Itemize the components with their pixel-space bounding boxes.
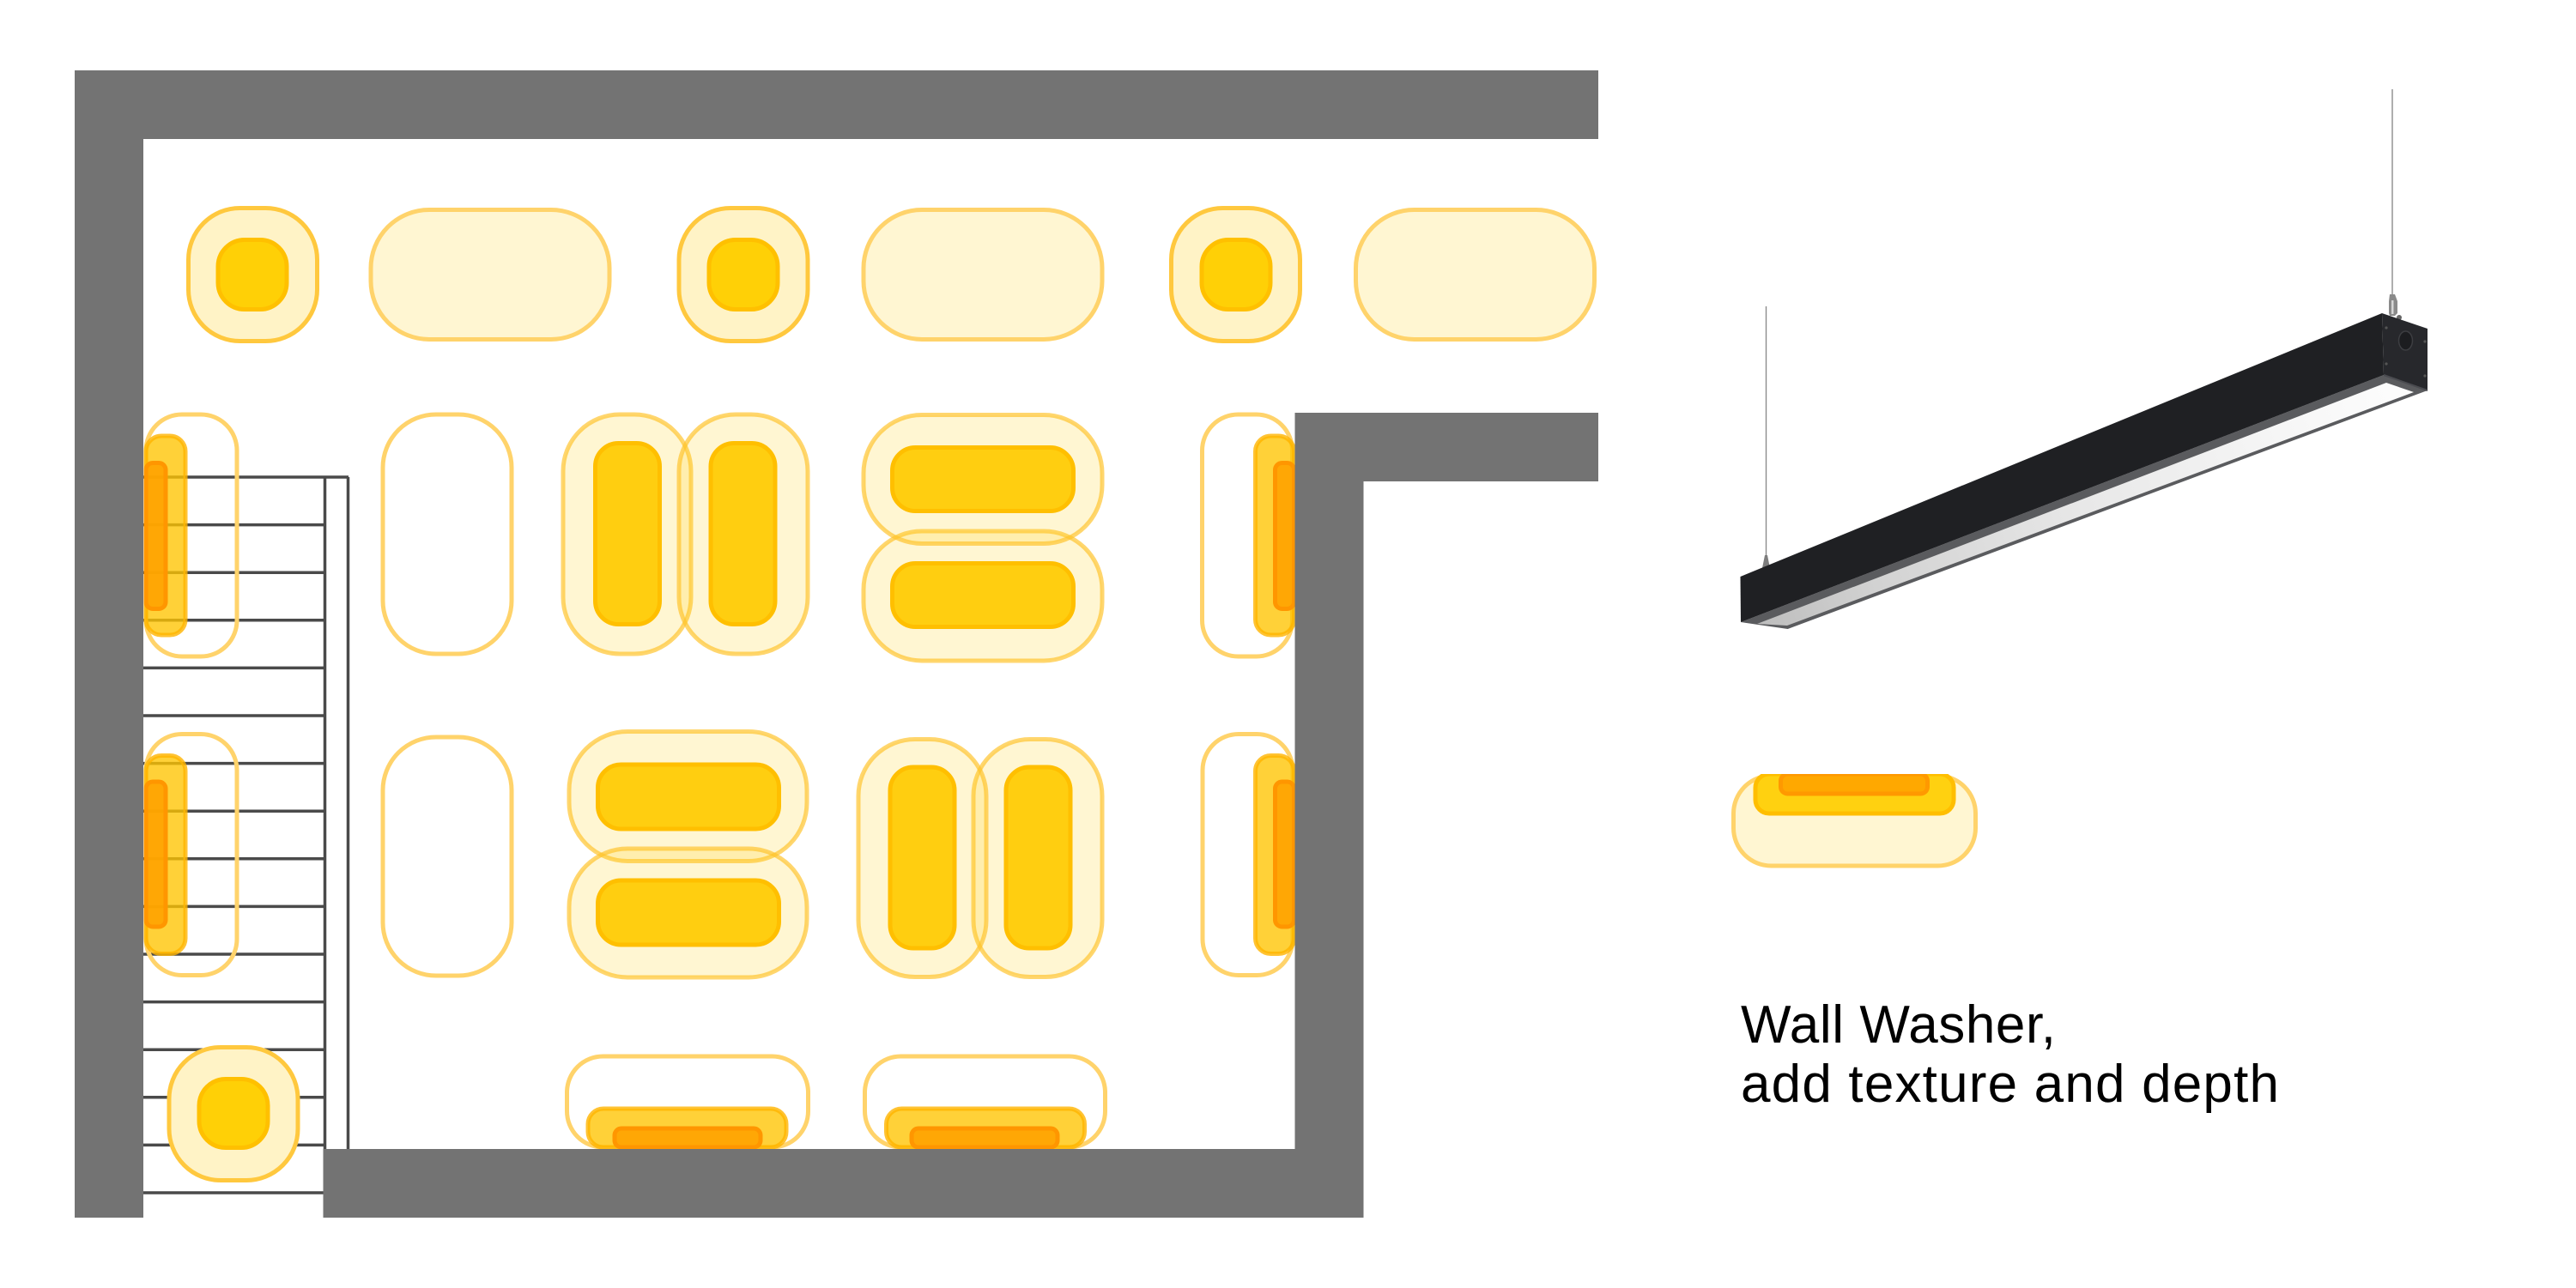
walls xyxy=(75,70,1598,1218)
body side face xyxy=(1741,313,2384,622)
row 2 fixtures xyxy=(146,414,1294,661)
right wall washer upper xyxy=(1202,414,1294,656)
legend icon: wall washer xyxy=(1731,755,1980,866)
staircase xyxy=(143,477,349,1194)
empty outline lower xyxy=(383,737,512,976)
end cap xyxy=(2382,313,2428,390)
product image: suspended linear luminaire xyxy=(1741,89,2428,629)
wide glow 2 xyxy=(864,209,1102,340)
spot light 3 xyxy=(1171,208,1300,342)
diffuser xyxy=(1757,383,2414,626)
left wall washer upper xyxy=(146,414,237,656)
empty outline upper xyxy=(383,414,512,654)
wide glow 1 xyxy=(371,209,609,340)
row 3 fixtures xyxy=(146,731,1294,977)
caption: Wall Washer, xyxy=(1741,995,2056,1055)
bottom wall washer 2 xyxy=(865,1056,1106,1147)
light strip housing xyxy=(1741,375,2428,629)
spot light 1 xyxy=(189,208,318,342)
cable clamps xyxy=(1762,294,2402,568)
horizontal pair lower xyxy=(569,731,807,977)
wide glow 3 xyxy=(1356,209,1595,340)
suspension cables xyxy=(1767,89,2392,558)
horizontal pair xyxy=(864,415,1102,661)
caption: add texture and depth xyxy=(1741,1055,2279,1114)
left wall washer lower xyxy=(146,735,237,975)
bottom wall washer 1 xyxy=(567,1056,809,1147)
vertical pair lower xyxy=(858,740,1102,977)
vertical pair xyxy=(563,414,808,654)
spot light 2 xyxy=(679,208,808,342)
right wall washer lower xyxy=(1203,735,1294,975)
stair spot light xyxy=(169,1047,298,1181)
caption xyxy=(1741,995,2279,1114)
row 1 ceiling lights xyxy=(189,208,1595,342)
bottom row fixtures xyxy=(169,1047,1106,1181)
